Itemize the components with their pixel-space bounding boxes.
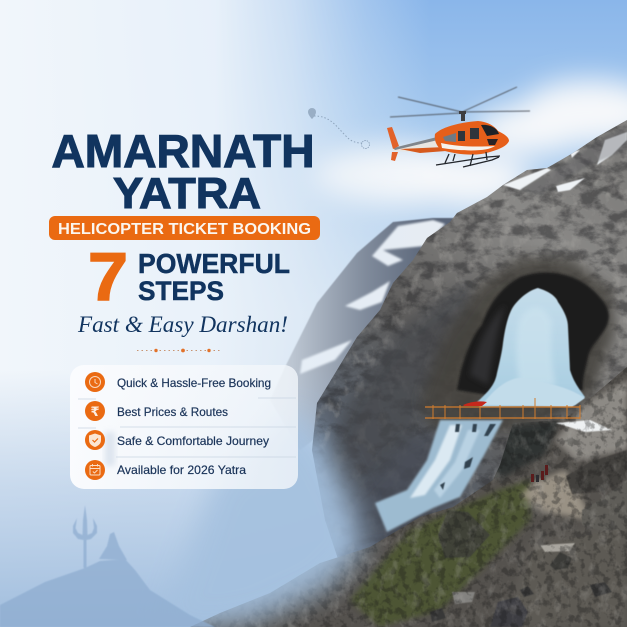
route marker: map pin and dotted path — [308, 108, 370, 148]
big number seven with steps heading — [88, 239, 290, 315]
big number seven with steps heading: STEPS — [138, 276, 224, 306]
icon: calendar — [85, 460, 105, 480]
dotted divider — [137, 349, 222, 352]
script tagline: Fast & Easy Darshan! — [77, 312, 288, 337]
cave opening — [457, 272, 609, 400]
panel: benefits card — [70, 365, 298, 489]
orange subtitle banner — [49, 216, 320, 240]
ice lingam — [477, 288, 585, 407]
people — [531, 465, 548, 482]
helicopter — [387, 87, 530, 167]
clouds — [310, 80, 627, 206]
orange railing — [425, 398, 580, 419]
big number seven with steps heading: POWERFUL — [138, 248, 290, 279]
windows — [443, 133, 456, 142]
silhouette: trident and meditating Shiva on peak — [0, 505, 215, 627]
fuselage — [435, 121, 509, 155]
benefit text: availability: Available for 2026 Yatra — [117, 463, 246, 477]
benefit text: booking: Quick & Hassle-Free Booking — [117, 376, 271, 390]
distant snowy mountain — [270, 218, 470, 450]
benefit text: safety: Safe & Comfortable Journey — [117, 434, 269, 448]
title: YATRA — [113, 169, 261, 218]
benefit text: prices: Best Prices & Routes — [117, 405, 228, 419]
rotor blades — [390, 87, 530, 117]
orange subtitle banner: HELICOPTER TICKET BOOKING — [58, 221, 311, 238]
boulders — [430, 450, 627, 627]
tail fin — [387, 127, 399, 161]
lower fog — [0, 370, 627, 627]
foreground rocky slope — [190, 365, 627, 627]
waterfall — [375, 420, 503, 532]
skids — [436, 152, 500, 167]
icon: rupee — [85, 401, 105, 421]
left white fade — [0, 0, 430, 627]
icon: rupee: ₹ — [90, 405, 100, 420]
icon: shield — [85, 430, 105, 450]
title — [52, 125, 314, 218]
big number seven with steps heading: 7 — [88, 239, 128, 315]
tail boom — [393, 137, 445, 152]
rock massif — [312, 120, 627, 558]
haze over lower-left rock — [160, 410, 365, 627]
title: AMARNATH — [52, 125, 314, 177]
icon: clock — [85, 372, 105, 392]
